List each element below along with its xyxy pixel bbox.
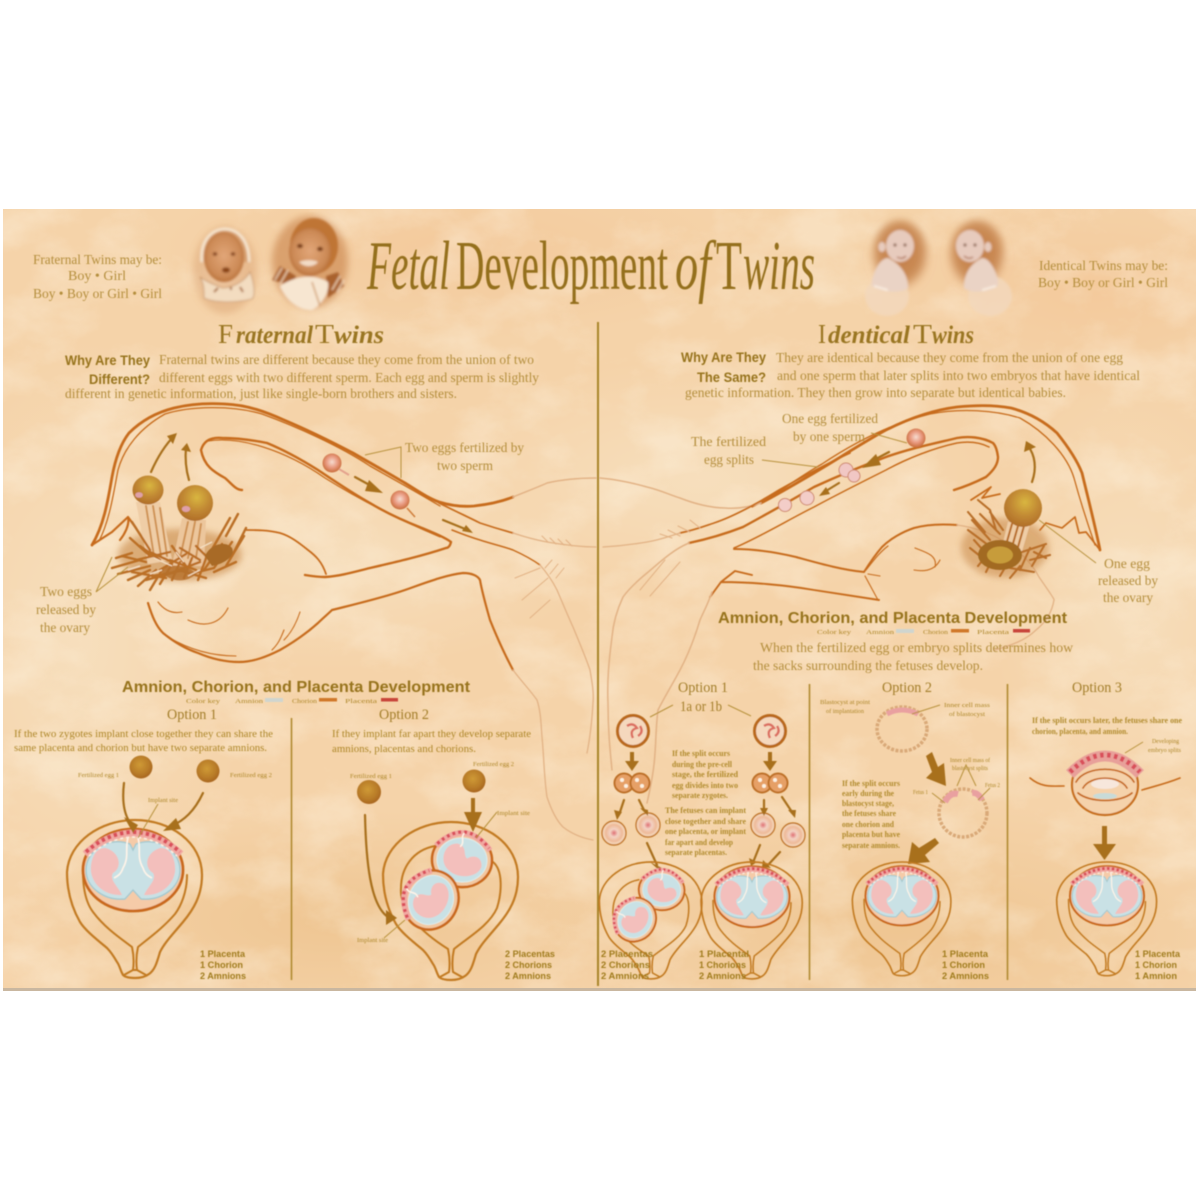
text: pre-cell split: separate zygotes.	[672, 791, 728, 800]
summary: 2 Amnions	[942, 971, 989, 982]
anatomy: reproductive tract left	[92, 404, 596, 840]
option 2 text: If they implant far apart they develop separate	[332, 729, 532, 740]
photo: identical baby left	[865, 220, 930, 316]
text: when the egg splits	[753, 641, 1074, 674]
label: one egg released	[1098, 557, 1158, 606]
text: pre-cell split: close together and share	[665, 817, 746, 826]
title: Fetal	[366, 228, 450, 305]
dividers	[292, 684, 1008, 980]
fertilized eggs	[357, 770, 486, 804]
text: pre-cell split: The fetuses can implant	[665, 806, 746, 815]
small labels	[78, 773, 272, 804]
big arrows	[908, 752, 946, 864]
ovary right with released egg	[961, 487, 1100, 578]
blastocyst 1	[877, 705, 940, 751]
small labels: Inner cell mass	[944, 703, 991, 709]
text: blastocyst split: blastocyst stage,	[842, 799, 894, 808]
anatomy: reproductive tract right	[600, 406, 1100, 803]
summary: 1 Placenta	[1135, 949, 1181, 960]
text: pre-cell split: far apart and develop	[665, 838, 734, 847]
title: of	[675, 228, 717, 305]
colour key fraternal: Amnion	[235, 699, 263, 705]
option 3 text	[1032, 716, 1182, 754]
summary 1b: 2 Amnions	[699, 971, 746, 982]
text: pre-cell split: egg divides into two	[672, 781, 738, 790]
two-cell stage	[614, 774, 788, 792]
text: blastocyst split: separate amnions.	[842, 841, 900, 850]
label: fertilized egg splits: egg splits	[704, 453, 754, 468]
text: why are they different: different in genetic information, just like single-born brothers and sisters.	[65, 387, 457, 402]
text: blastocyst split: one chorion and	[842, 820, 895, 829]
1a or 1b label: 1a or 1b	[680, 699, 722, 715]
label: two eggs released	[36, 585, 96, 636]
uterus	[852, 862, 951, 976]
label: two eggs fertilized	[405, 441, 524, 474]
heading: Identical Twins: dentical	[828, 322, 910, 349]
text: why are they the same	[681, 349, 1140, 401]
blastocyst 2	[932, 765, 990, 837]
label: one egg released: One egg	[1104, 557, 1150, 572]
colour key fraternal: Placenta	[345, 699, 378, 705]
label: one egg fertilized: by one sperm	[793, 430, 865, 445]
option 2 heading: Option 2	[882, 680, 932, 696]
small labels: Implant site	[357, 938, 388, 944]
heading: Fraternal Twins: wins	[334, 322, 384, 349]
text: why are they the same: and one sperm that later splits into two embryos that have identical	[777, 369, 1140, 384]
text: blastocyst split	[842, 779, 900, 850]
uterus	[1057, 862, 1157, 976]
small labels: Fertilized egg 1	[78, 773, 119, 779]
small labels	[820, 700, 1000, 796]
separated zygotes	[602, 813, 805, 847]
small labels: Implant site	[497, 811, 530, 817]
text: when the egg splits: the sacks surrounding the fetuses develop.	[753, 659, 983, 674]
title: wins	[743, 228, 815, 305]
text: pre-cell split: one placenta, or implant	[665, 827, 746, 836]
option 1 heading: Option 1	[167, 707, 217, 723]
identical may-be note: Boy • Boy or Girl • Girl	[1038, 276, 1168, 291]
summary 1a: 2 Chorions	[601, 960, 650, 971]
zygotes	[618, 716, 786, 746]
text: pre-cell split: during the pre-cell	[672, 760, 733, 769]
identical may-be note: Identical Twins may be:	[1039, 259, 1168, 274]
text: why are they different: Why Are They	[65, 352, 150, 368]
text: pre-cell split: stage, the fertilized	[672, 770, 739, 779]
colour key identical: Placenta	[977, 630, 1010, 636]
label lines for tract	[96, 433, 1096, 592]
summary	[1135, 949, 1181, 982]
small labels: Fetus 1	[913, 790, 928, 796]
embryo splitting	[1030, 742, 1180, 815]
uterus 1a	[599, 862, 702, 979]
panel: fraternal option 1	[14, 707, 274, 982]
label: one egg released: released by	[1098, 574, 1158, 589]
label: two eggs fertilized: two sperm	[437, 459, 493, 474]
small labels: of blastocyst	[949, 711, 985, 718]
heading: Identical Twins: wins	[932, 322, 974, 349]
fertilized and split eggs right	[778, 428, 926, 512]
uterus with shared placenta	[67, 820, 202, 978]
option 1 heading: Option 1	[678, 680, 728, 696]
fraternal may-be note	[33, 253, 162, 302]
down arrows	[614, 752, 796, 872]
fertilized egg 2	[196, 760, 220, 782]
option 3 text: chorion, placenta, and amnion.	[1032, 727, 1128, 736]
arrows into uterus	[365, 798, 497, 938]
label: two eggs released: the ovary	[40, 621, 90, 636]
colour key identical: Chorion	[923, 630, 948, 636]
summary 1a	[601, 949, 653, 982]
label: two eggs released: released by	[36, 603, 96, 618]
heading: Identical Twins	[818, 319, 974, 349]
option 3 text: If the split occurs later, the fetuses share one	[1032, 716, 1182, 725]
option 3 text: Developing	[1152, 739, 1179, 745]
text: when the egg splits: When the fertilized egg or embryo splits determines how	[760, 641, 1074, 656]
small labels: Inner cell mass of	[950, 757, 990, 764]
heading: Identical Twins: T	[913, 319, 933, 349]
small labels: of implantation	[826, 708, 864, 715]
small labels: Fertilized egg 2	[230, 773, 272, 779]
option 1 text	[14, 729, 274, 754]
panel: fraternal option 2	[332, 707, 555, 982]
small labels	[350, 762, 530, 944]
text: why are they different: different eggs with two different sperm. Each egg and sperm is slightly	[159, 371, 539, 386]
summary: 1 Chorion	[1135, 960, 1177, 971]
text: why are they different: Fraternal twins are different because they come from the union of two	[159, 353, 534, 368]
summary: 1 Chorion	[942, 960, 985, 971]
small labels: blastocyst splits	[952, 766, 989, 772]
summary: 1 Amnion	[1135, 971, 1177, 982]
summary: 2 Amnions	[200, 971, 246, 982]
label: two eggs fertilized: Two eggs fertilized by	[405, 441, 524, 456]
label: one egg released: the ovary	[1103, 591, 1153, 606]
summary	[505, 949, 555, 982]
text: pre-cell split: separate placentas.	[665, 848, 727, 857]
colour key identical: Amnion	[866, 630, 894, 636]
option 1 text: If the two zygotes implant close together they can share the	[14, 729, 274, 740]
identical may-be note	[1038, 259, 1168, 291]
title: T	[716, 228, 742, 305]
fertilized egg 1	[130, 756, 152, 778]
heading: Fraternal Twins: F	[218, 319, 233, 349]
arrows along tract	[151, 433, 1036, 533]
summary 1b: 1 Chorions	[699, 960, 746, 971]
summary: 2 Placentas	[505, 949, 555, 960]
summary 1b	[699, 949, 749, 982]
summary: 1 Placenta	[942, 949, 989, 960]
label: fertilized egg splits	[691, 435, 766, 468]
option 3 text: embryo splits	[1148, 748, 1182, 754]
uterus with separate sacs	[383, 822, 518, 980]
photo: fraternal baby 1	[193, 226, 257, 314]
fraternal may-be note: Boy • Boy or Girl • Girl	[33, 287, 162, 302]
fertilized eggs left	[322, 454, 415, 517]
text: why are they the same: Why Are They	[681, 349, 766, 365]
small labels: Fertilized egg 2	[473, 762, 514, 768]
colour key fraternal	[186, 698, 398, 705]
text: why are they different	[65, 352, 539, 402]
text: why are they the same: They are identical because they come from the union of one egg	[776, 351, 1123, 366]
ovary left with released eggs	[92, 476, 246, 590]
small labels: Fertilized egg 1	[350, 774, 392, 780]
fraternal may-be note: Boy • Girl	[68, 269, 126, 284]
summary	[942, 949, 989, 982]
label: one egg fertilized	[782, 412, 878, 445]
small labels: Blastocyst at point	[820, 700, 870, 706]
summary 1a: 2 Amnions	[601, 971, 649, 982]
heading: fraternal development: Amnion, Chorion, and Placenta Development	[122, 679, 471, 696]
text: blastocyst split: the fetuses share	[842, 809, 896, 818]
colour key identical	[817, 629, 1030, 636]
small labels: Fetus 2	[985, 783, 1000, 789]
panel: identical option 2	[820, 680, 1000, 982]
text: blastocyst split: If the split occurs	[842, 779, 900, 788]
small labels: Implant site	[148, 798, 178, 804]
arrows into uterus	[123, 783, 203, 838]
text: pre-cell split: If the split occurs	[672, 749, 730, 758]
colour key identical: Color key	[817, 630, 851, 636]
summary: 1 Placenta	[200, 949, 246, 960]
big arrow	[1093, 826, 1116, 860]
summary: 2 Chorions	[505, 960, 552, 971]
text: blastocyst split: early during the	[842, 789, 894, 798]
heading: Fraternal Twins: raternal	[236, 322, 313, 349]
text: why are they the same: The Same?	[697, 369, 766, 385]
option 1 text: same placenta and chorion but have two separate amnions.	[14, 743, 267, 754]
colour key fraternal: Chorion	[292, 699, 317, 705]
text: why are they different: Different?	[89, 371, 150, 387]
text: why are they the same: genetic information. They then grow into separate but identical babies.	[685, 386, 1066, 401]
text: pre-cell split	[665, 749, 746, 857]
label: one egg fertilized: One egg fertilized	[782, 412, 878, 427]
poster paper background	[0, 160, 1200, 1060]
colour key fraternal: Color key	[186, 699, 220, 705]
label: fertilized egg splits: The fertilized	[691, 435, 766, 450]
text: blastocyst split: placenta but have	[842, 830, 900, 839]
photo: fraternal baby 2	[272, 216, 348, 310]
heading: Fraternal Twins	[218, 319, 384, 349]
option 3 heading: Option 3	[1072, 680, 1122, 696]
heading: identical development: Amnion, Chorion, and Placenta Development	[718, 610, 1068, 627]
summary 1a: 2 Placentas	[601, 949, 653, 960]
option 2 text: amnions, placentas and chorions.	[332, 744, 476, 755]
photo: identical baby right	[947, 220, 1012, 316]
fraternal may-be note: Fraternal Twins may be:	[33, 253, 162, 268]
heading: Fraternal Twins: T	[315, 319, 335, 349]
option 2 text	[332, 729, 532, 755]
option 2 heading: Option 2	[379, 707, 429, 723]
summary: 1 Chorion	[200, 960, 243, 971]
title: Development	[456, 228, 668, 305]
summary: 2 Amnions	[505, 971, 551, 982]
panel: identical option 1	[599, 680, 805, 982]
panel: identical option 3	[1030, 680, 1182, 982]
zygote branches	[650, 705, 751, 717]
uterus 1b	[701, 862, 802, 979]
summary	[200, 949, 246, 982]
heading: Identical Twins: I	[818, 319, 826, 349]
centre divider	[597, 322, 599, 986]
summary 1b: 1 Placental	[699, 949, 749, 960]
label: two eggs released: Two eggs	[40, 585, 92, 600]
